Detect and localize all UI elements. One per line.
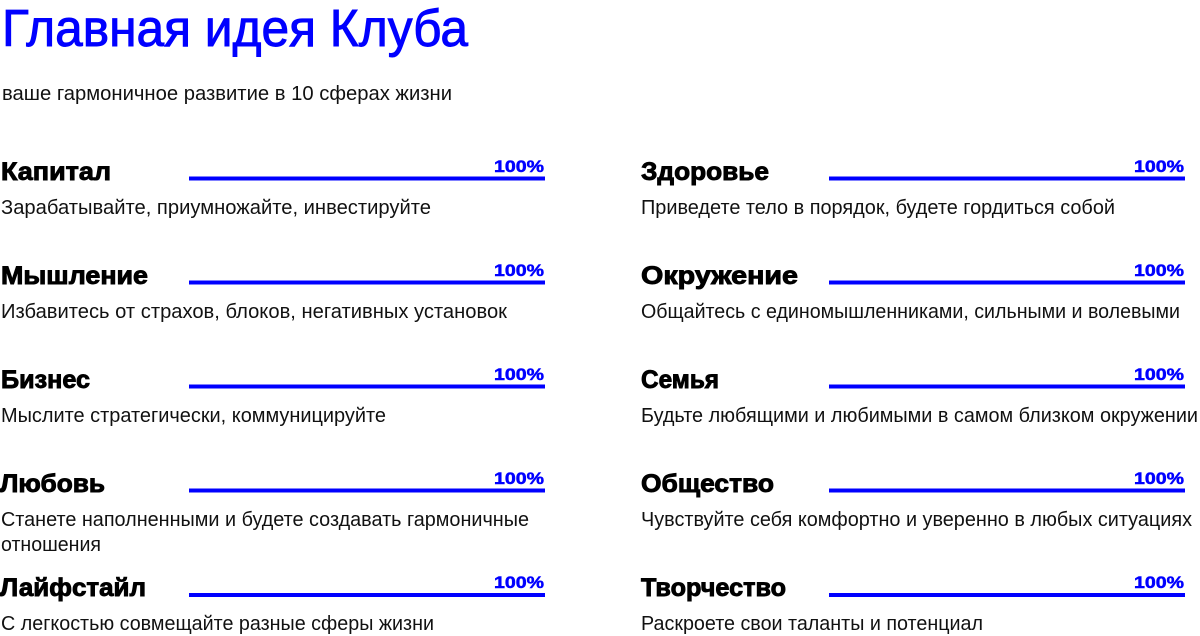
item: Бизнес: 100%	[494, 365, 544, 384]
item: Мышление	[1, 261, 545, 323]
item: Лайфстайл	[0, 573, 545, 635]
item: Окружение: Окружение	[641, 262, 798, 290]
item: Окружение: 100%	[1134, 261, 1184, 280]
item: Бизнес: Бизнес	[1, 366, 90, 394]
item: Капитал: Зарабатывайте, приумножайте, инвестируйте	[1, 197, 431, 219]
item: Мышление: 100%	[494, 261, 544, 280]
item: Мышление: Избавитесь от страхов, блоков, негативных установок	[1, 301, 507, 323]
item: Капитал: Капитал	[1, 158, 111, 186]
item: Семья	[641, 365, 1198, 427]
item: Любовь: отношения	[1, 534, 101, 556]
item: Творчество	[641, 573, 1185, 635]
item: Здоровье	[641, 157, 1185, 219]
item: Семья: 100%	[1134, 365, 1184, 384]
item: Любовь: Любовь	[0, 470, 105, 498]
item: Общество: Общество	[641, 470, 774, 498]
item: Бизнес	[1, 365, 545, 427]
item: Мышление: Мышление	[1, 262, 148, 290]
item: Лайфстайл: 100%	[494, 573, 544, 592]
item: Общество: 100%	[1134, 469, 1184, 488]
item: Семья: Семья	[641, 366, 719, 394]
item: Лайфстайл: С легкостью совмещайте разные сферы жизни	[1, 613, 434, 635]
item: Любовь	[0, 469, 545, 556]
item: Семья: Будьте любящими и любимыми в самом близком окружении	[641, 405, 1198, 427]
item: Любовь: 100%	[494, 469, 544, 488]
item: Капитал: 100%	[494, 157, 544, 176]
item: Творчество: Творчество	[641, 574, 786, 602]
item: Общество: Чувствуйте себя комфортно и уверенно в любых ситуациях	[641, 509, 1192, 531]
item: Здоровье: Здоровье	[641, 158, 769, 186]
item: Творчество: Раскроете свои таланты и потенциал	[641, 613, 983, 635]
item: Бизнес: Мыслите стратегически, коммуницируйте	[1, 405, 386, 427]
item: Любовь: Станете наполненными и будете создавать гармоничные	[1, 509, 529, 531]
title: Главная идея Клуба	[2, 0, 468, 58]
item: Общество	[641, 469, 1192, 531]
item: Здоровье: Приведете тело в порядок, будете гордиться собой	[641, 197, 1115, 219]
item: Окружение: Общайтесь с единомышленниками, сильными и волевыми	[641, 301, 1180, 323]
subtitle: ваше гармоничное развитие в 10 сферах жизни	[2, 83, 452, 105]
item: Творчество: 100%	[1134, 573, 1184, 592]
item: Лайфстайл: Лайфстайл	[0, 574, 146, 602]
item: Капитал	[1, 157, 545, 219]
item: Окружение	[641, 261, 1185, 323]
item: Здоровье: 100%	[1134, 157, 1184, 176]
